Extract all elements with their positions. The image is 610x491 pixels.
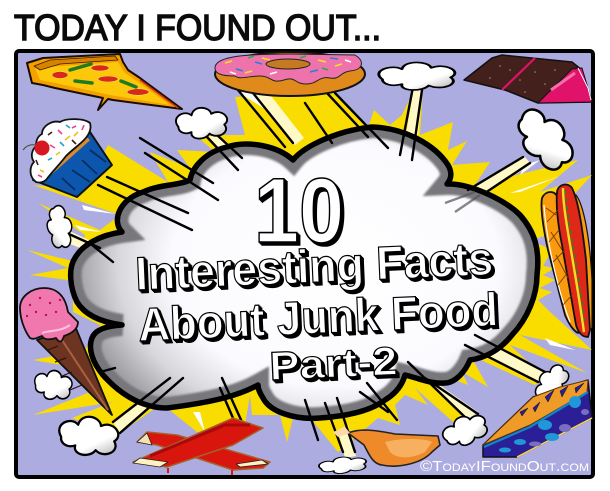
small smoke clouds [32, 62, 582, 475]
title: TODAY I FOUND OUT... [14, 7, 381, 48]
icon: hot dog [541, 185, 592, 337]
icon: chocolate cake slice [464, 55, 592, 103]
yellow explosion burst [27, 88, 592, 452]
speed rays to small clouds [60, 85, 545, 458]
smoke cloud behind pie [529, 360, 574, 406]
smoke cloud bottom left [56, 413, 120, 459]
smoke cloud left [44, 204, 75, 250]
copyright watermark: ©TodayIFoundOut.com [420, 458, 589, 475]
line: Part-2: Part-2 [268, 339, 398, 389]
blurred lines at cloud notch [445, 192, 480, 212]
heading: number 10: 10 [254, 160, 344, 262]
line: About Junk Food: About Junk Food [137, 282, 499, 351]
smoke cloud bottom right [439, 410, 491, 452]
icon: cupcake [23, 119, 112, 197]
smoke cloud lower left [32, 367, 74, 403]
smoke cloud right [507, 100, 582, 178]
icon: donut [215, 52, 365, 96]
white highlights on rays [75, 92, 575, 432]
icon: pizza slice [27, 54, 182, 110]
smoke cloud top right [379, 62, 455, 90]
smoke cloud bottom centre [318, 455, 367, 475]
icon: blueberry pie slice [483, 380, 592, 457]
line: Interesting Facts: Interesting Facts [134, 231, 494, 300]
cloud: main speech burst [71, 127, 538, 418]
heading: main title lines [134, 231, 499, 389]
smoke cloud top left [176, 108, 227, 139]
icon: fried chicken [333, 427, 440, 466]
icon: ice cream cone [20, 288, 112, 415]
icon: bacon strips [133, 418, 270, 475]
black speed lines [60, 87, 547, 452]
